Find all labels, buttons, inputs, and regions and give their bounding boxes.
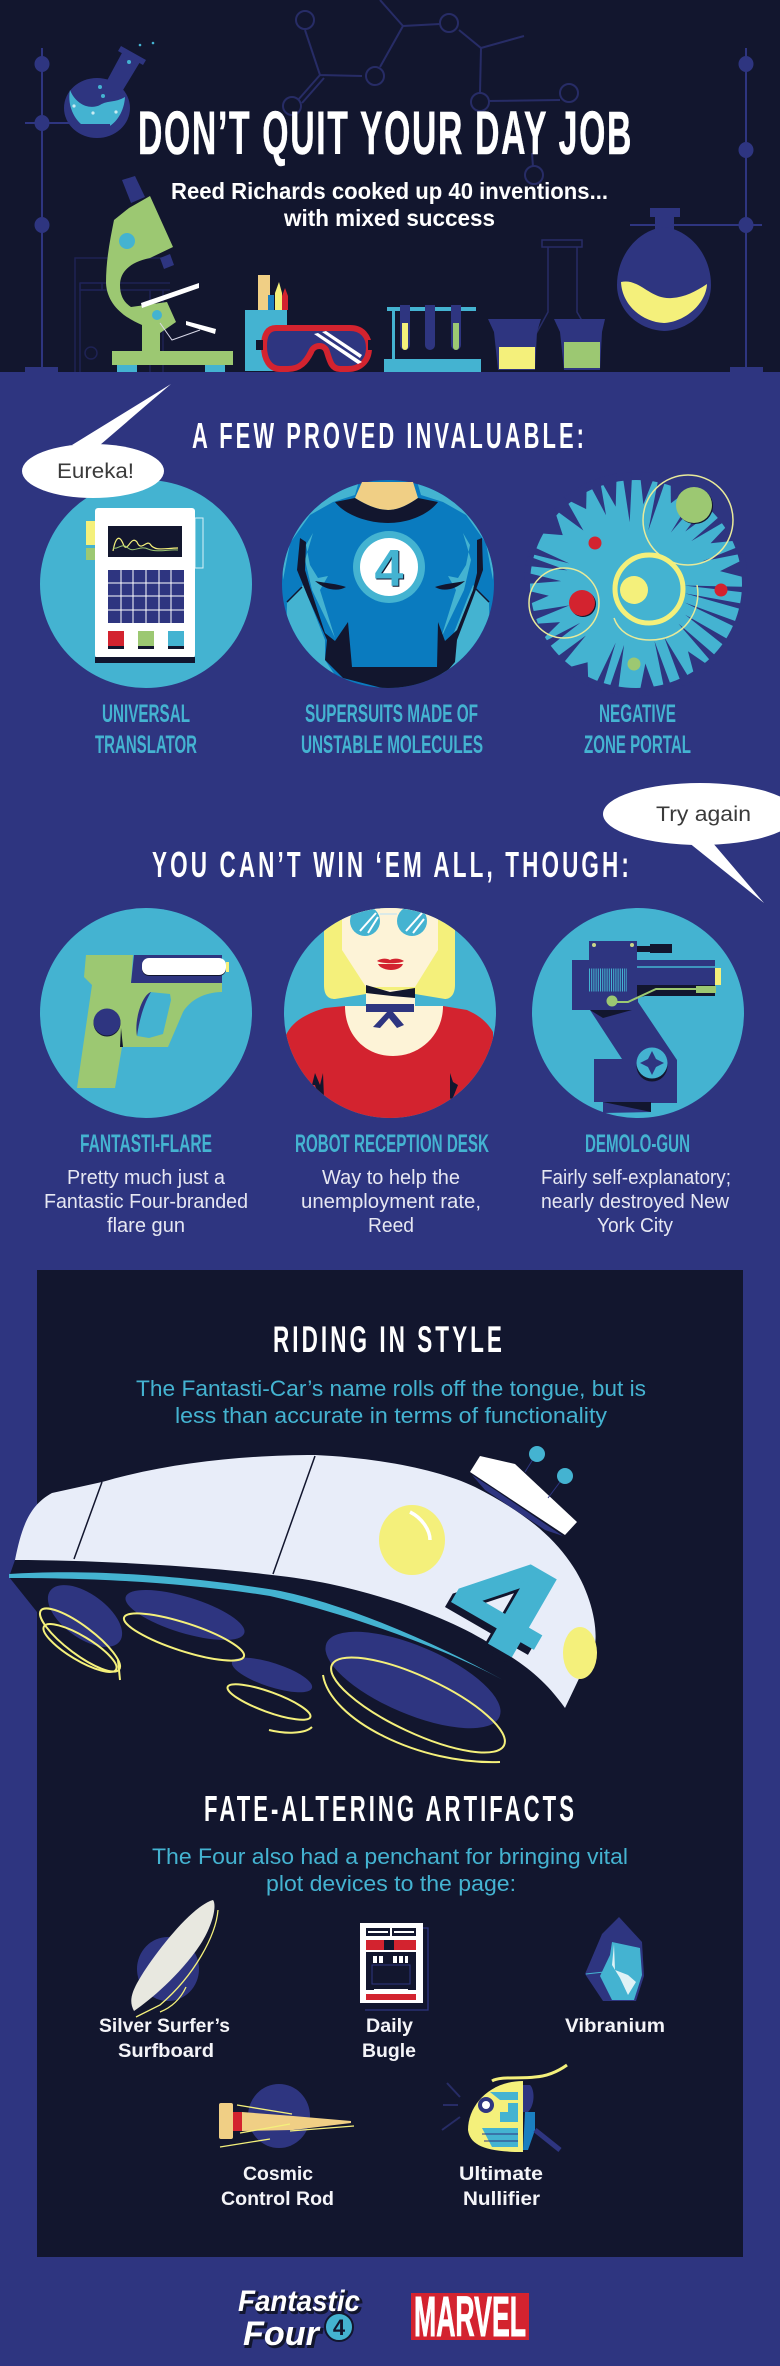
panel: dark lower section: [37, 1270, 743, 2257]
icon: beakers and flask outline: [488, 240, 605, 370]
icon: ultimate nullifier: [442, 2065, 567, 2152]
logo: Fantastic Four: [238, 2285, 362, 2355]
artifact labels: Daily: [366, 2016, 413, 2037]
icon: large flask with yellow liquid: [617, 208, 711, 331]
car dome: [15, 1455, 596, 1708]
labels: first row: UNIVERSAL: [102, 700, 190, 728]
panel: universal translator: [40, 480, 252, 688]
description: robot reception desk: Reed: [368, 1215, 414, 1237]
icon: cosmic control rod: [219, 2084, 354, 2148]
labels: second row: ROBOT RECEPTION DESK: [295, 1130, 489, 1158]
icon: silver surfboard: [131, 1900, 218, 2017]
description: fantasti-flare: [44, 1167, 248, 1237]
thrusters: [37, 1573, 513, 1748]
labels: first row: SUPERSUITS MADE OF: [305, 700, 478, 728]
subtitle: [171, 178, 608, 231]
labels: first row: TRANSLATOR: [95, 731, 197, 759]
artifact labels: Surfboard: [118, 2041, 214, 2062]
panel: robot reception desk: [284, 900, 496, 1125]
artifact labels: Nullifier: [463, 2189, 541, 2210]
text: MARVEL: [414, 2285, 526, 2349]
labels: first row: NEGATIVE: [599, 700, 676, 728]
illustration: fantasti-car: [9, 1446, 597, 1771]
description: robot reception desk: [301, 1167, 481, 1237]
lab stand right: [630, 48, 763, 373]
description: fantasti-flare: flare gun: [107, 1215, 185, 1237]
car number: 4: [424, 1524, 575, 1691]
artifact labels: Vibranium: [565, 2016, 665, 2037]
icon: vibranium: [585, 1917, 644, 2001]
subtitle: Reed Richards cooked up 40 inventions...: [171, 178, 608, 204]
description: robot reception desk: unemployment rate,: [301, 1191, 481, 1213]
shoulder highlights: [282, 484, 494, 580]
paragraph: fantasti-car: less than accurate in terms of functionality: [175, 1403, 607, 1428]
description: demolo-gun: Fairly self-explanatory;: [541, 1167, 731, 1189]
artifact labels: Ultimate: [459, 2164, 543, 2185]
speech bubble: Eureka: [22, 384, 171, 498]
artifact labels: [99, 2016, 665, 2210]
paragraph: artifacts: The Four also had a penchant for bringing vital: [152, 1844, 628, 1869]
paragraph: fantasti-car: [136, 1376, 646, 1428]
molecule diagram: [283, 0, 578, 184]
header panel: lab scene: [0, 0, 780, 373]
panel: demolo-gun: [532, 908, 744, 1118]
labels: first row: [95, 700, 691, 759]
paragraph: fantasti-car: The Fantasti-Car’s name rolls off the tongue, but is: [136, 1376, 646, 1401]
description: fantasti-flare: Fantastic Four-branded: [44, 1191, 248, 1213]
panel: supersuit: 4: [375, 540, 404, 598]
icon: goggles: [256, 328, 374, 369]
cabinet outline: [75, 258, 170, 372]
labels: first row: UNSTABLE MOLECULES: [301, 731, 483, 759]
artifact labels: Silver Surfer’s: [99, 2016, 230, 2037]
panel: fantasti-flare: [40, 908, 252, 1118]
icon: microscope: [106, 176, 233, 372]
speech bubble: Try again: [603, 783, 780, 903]
description: demolo-gun: nearly destroyed New: [541, 1191, 730, 1213]
paragraph: artifacts: [152, 1844, 628, 1896]
headlights: [379, 1505, 445, 1575]
heading: riding in style: RIDING IN STYLE: [273, 1319, 505, 1360]
artifact labels: Bugle: [362, 2041, 416, 2062]
panel: supersuit: [278, 478, 498, 690]
logo: Fantastic Four: 4: [333, 2315, 346, 2340]
logo: Fantastic Four: Fantastic: [240, 2287, 362, 2320]
paragraph: artifacts: plot devices to the page:: [266, 1871, 516, 1896]
icon: test tube rack: [384, 305, 481, 372]
labels: first row: ZONE PORTAL: [584, 731, 691, 759]
description: demolo-gun: [541, 1167, 731, 1237]
spoiler: [472, 1475, 563, 1536]
logo: Fantastic Four: Fantastic: [238, 2285, 360, 2318]
labels: second row: DEMOLO-GUN: [585, 1130, 690, 1158]
description: demolo-gun: York City: [597, 1215, 673, 1237]
subtitle: with mixed success: [283, 205, 495, 231]
panel: negative zone portal: [524, 472, 748, 696]
labels: second row: [80, 1130, 690, 1158]
lab stand left: [25, 48, 70, 373]
speech bubble: Try again: Try again: [656, 803, 751, 826]
logo: Marvel: [411, 2285, 529, 2349]
icon: daily bugle: [360, 1923, 428, 2010]
speech bubble: Eureka: Eureka!: [57, 460, 134, 483]
logo: Fantastic Four: Four: [243, 2315, 321, 2353]
panel: supersuit: 4: [376, 541, 405, 599]
car number: 4: [430, 1519, 581, 1686]
icon: round flask: [64, 42, 154, 138]
description: fantasti-flare: Pretty much just a: [67, 1167, 226, 1189]
description: robot reception desk: Way to help the: [322, 1167, 460, 1189]
labels: second row: FANTASTI-FLARE: [80, 1130, 212, 1158]
dark suit panels: [297, 538, 483, 690]
logo: Fantastic Four: Four: [245, 2317, 323, 2355]
artifact labels: Control Rod: [221, 2189, 334, 2210]
icon: pencil cup: [245, 275, 288, 371]
artifact labels: Cosmic: [243, 2164, 313, 2185]
thruster rings: [32, 1599, 516, 1771]
